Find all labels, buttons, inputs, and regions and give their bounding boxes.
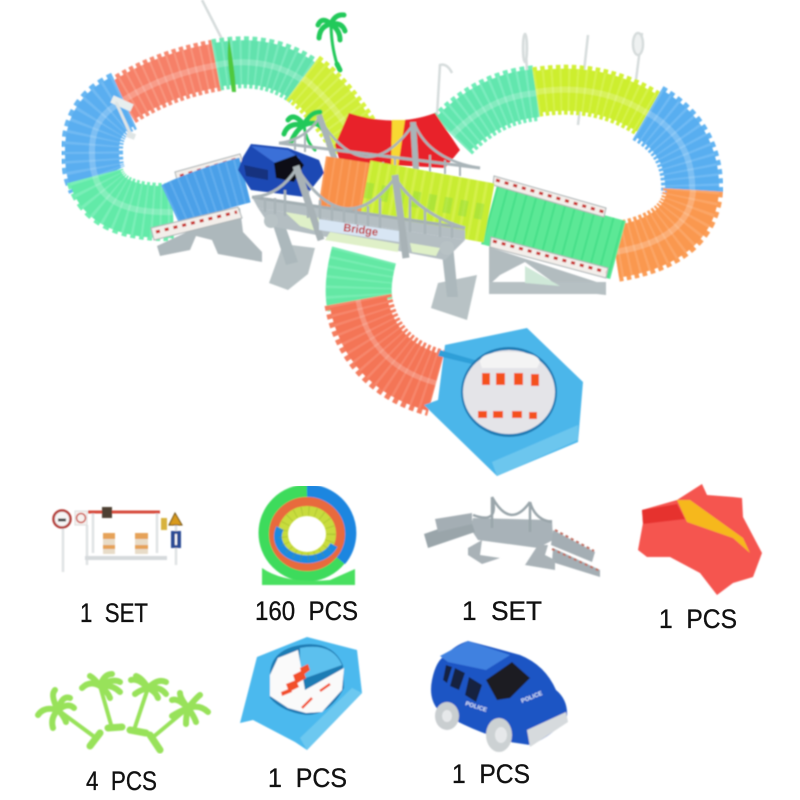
- label: 160 PCS: 160 PCS: [255, 596, 358, 626]
- left ramp rail lower: [151, 207, 242, 240]
- label: 1 SET: 1 SET: [80, 598, 148, 628]
- left ramp support: [157, 208, 262, 262]
- track: right green deck: [489, 215, 618, 250]
- item: coiled track: [262, 491, 355, 585]
- pillars of suspension bridge: [269, 214, 477, 320]
- item: bridge kit: [424, 497, 600, 577]
- track: centre yellow deck: [365, 190, 489, 213]
- track: right loop orange: [615, 190, 693, 252]
- palm 3: [130, 676, 166, 733]
- track: left loop teal: [216, 62, 305, 82]
- track: lower green curve: [359, 255, 364, 305]
- label: 1 PCS red piece: 1 PCS: [659, 604, 737, 634]
- label: 1 SET bridge: 1 SET: [462, 596, 542, 626]
- track: lower red curve: [358, 300, 436, 383]
- bridge banner: [319, 219, 399, 242]
- police car on track: [238, 144, 324, 197]
- track: left loop yellow: [303, 78, 357, 142]
- crossing piece: red with yellow wedge: [335, 113, 460, 168]
- track: right loop yellow: [536, 90, 650, 115]
- track: left loop green: [95, 176, 173, 212]
- right ramp support: [489, 247, 606, 295]
- item: police car: [431, 641, 568, 752]
- illustration: assembled track set: [92, 0, 693, 476]
- label: 1 PCS launcher: 1 PCS: [268, 763, 347, 793]
- track: left blue deck: [171, 180, 245, 206]
- item: police car: POLICE: [464, 701, 487, 714]
- label: 1 PCS car: 1 PCS: [452, 759, 530, 789]
- item: red crossing piece: [638, 484, 762, 595]
- bridge back rail and cables: [279, 115, 480, 178]
- track: left loop blue: [92, 101, 124, 180]
- right ramp rail lower: [490, 237, 608, 278]
- palm trees on track: [284, 15, 345, 150]
- track: right loop blue: [648, 113, 692, 195]
- item: blue launcher: [240, 637, 362, 750]
- palm on left track: [228, 38, 236, 92]
- bridge banner: Bridge: [343, 222, 379, 239]
- sign poles behind track: [202, 0, 643, 125]
- road sign on left track: [112, 99, 135, 137]
- item: police car: POLICE: [521, 691, 543, 705]
- label: 4 PCS: 4 PCS: [86, 766, 157, 796]
- palm 2: [82, 674, 122, 728]
- item: four palm trees: [38, 674, 208, 750]
- left ramp rail upper: [175, 154, 243, 184]
- launcher red blocks: [478, 373, 539, 419]
- palm 4: [150, 693, 208, 750]
- right ramp rail upper: [493, 176, 606, 217]
- start pad: blue hexagon launcher: [424, 328, 583, 476]
- item: road signs set: [54, 507, 182, 572]
- track: right loop teal: [452, 93, 538, 135]
- track: centre orange deck: [322, 183, 368, 190]
- palm 1: [38, 690, 100, 746]
- track: left loop red: [122, 65, 218, 101]
- suspension bridge front: [252, 166, 465, 260]
